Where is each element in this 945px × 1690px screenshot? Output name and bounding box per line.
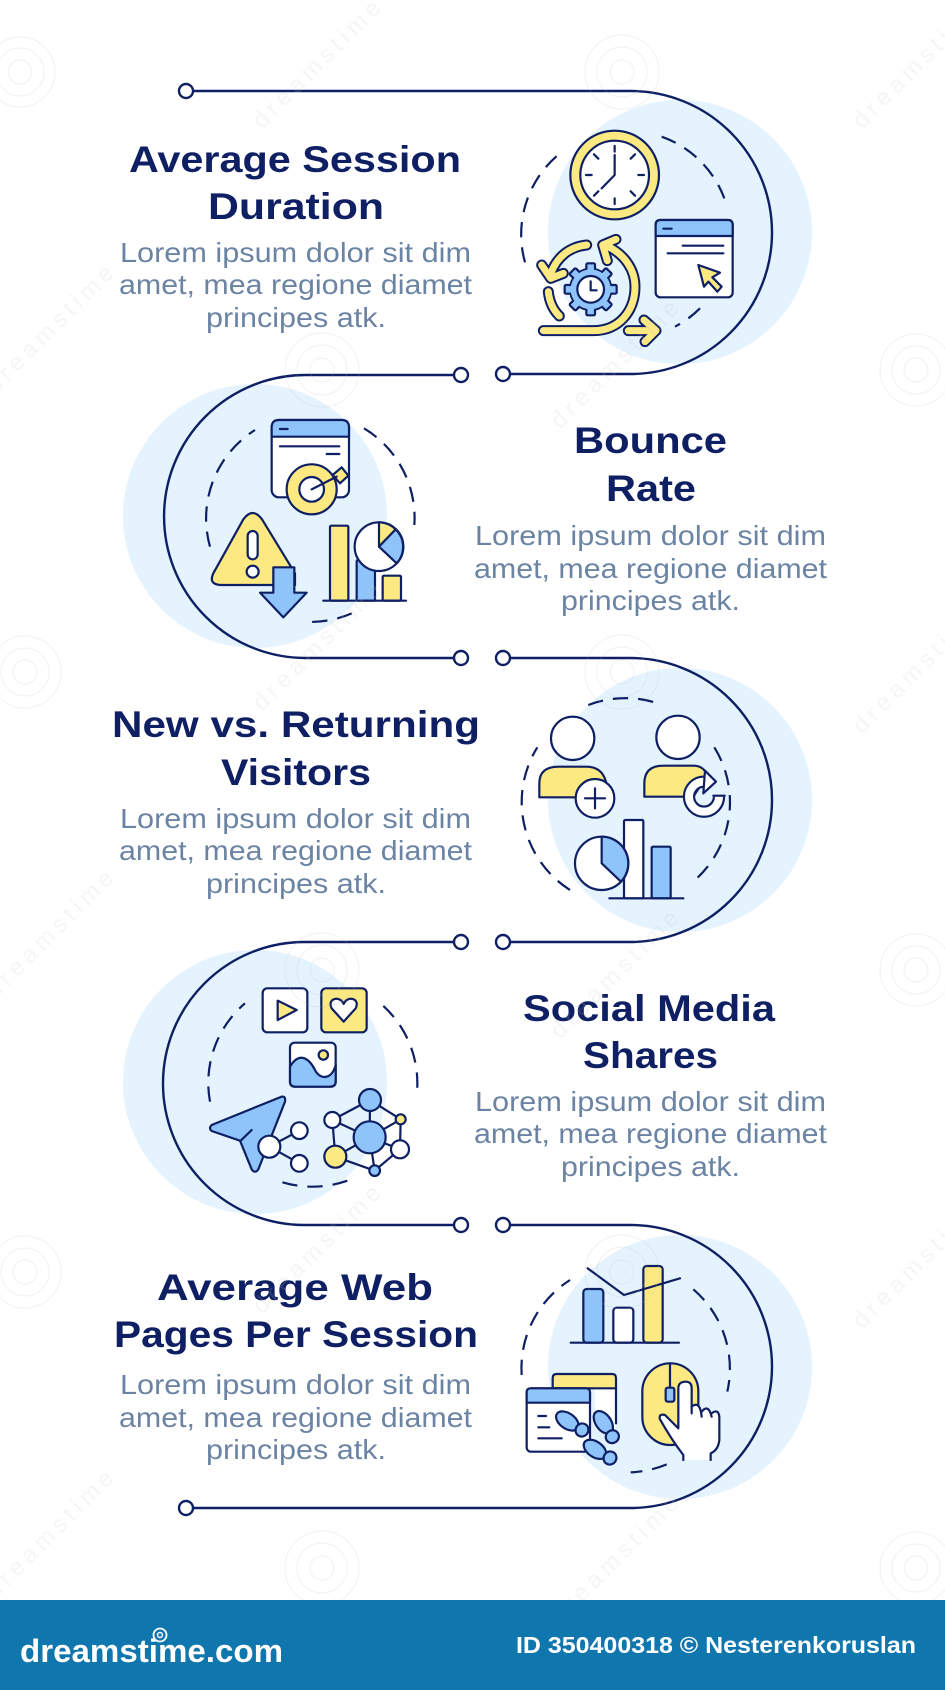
end node: [496, 367, 510, 381]
icon: bar chart, pages with footprints, mouse click: [521, 1266, 730, 1472]
background circle: [548, 668, 812, 932]
top node: [454, 368, 468, 382]
heading: [112, 704, 480, 793]
start node: [179, 84, 193, 98]
body text: amet, mea regione diamet: [474, 553, 827, 584]
connector line: [163, 942, 454, 1225]
heading: [574, 420, 727, 509]
bottom node: [454, 1218, 468, 1232]
body text: [474, 1086, 827, 1182]
icon: target, warning and charts: [206, 420, 415, 622]
background circle: [548, 1235, 812, 1499]
body text: principes atk.: [561, 1151, 740, 1182]
heading: Pages Per Session: [114, 1314, 478, 1355]
heading: Social Media: [523, 988, 775, 1029]
connector line: [510, 658, 772, 942]
heading: Shares: [583, 1035, 718, 1076]
panel: average session duration: [119, 84, 812, 381]
icon: media tiles, share plane and network: [208, 988, 417, 1187]
body text: [474, 520, 827, 616]
end node: [179, 1501, 193, 1515]
background circle: [548, 100, 812, 364]
heading: Rate: [606, 468, 696, 509]
heading: Visitors: [221, 752, 371, 793]
body text: Lorem ipsum dolor sit dim: [475, 520, 826, 551]
bottom node: [496, 935, 510, 949]
top node: [454, 935, 468, 949]
text: dreamstime: [545, 1490, 684, 1629]
heading: New vs. Returning: [112, 704, 480, 745]
body text: amet, mea regione diamet: [119, 835, 472, 866]
body text: amet, mea regione diamet: [119, 269, 472, 300]
body text: amet, mea regione diamet: [474, 1118, 827, 1149]
body text: principes atk.: [206, 1434, 386, 1465]
connector line: [164, 375, 454, 658]
panel: average web pages per session: [114, 1218, 812, 1515]
footer logo: dreamstime.com: [20, 1633, 283, 1669]
body text: [119, 803, 472, 899]
heading: Average Session: [129, 139, 461, 180]
body text: Lorem ipsum dolor sit dim: [120, 237, 471, 268]
footer credit: ID 350400318 © Nesterenkoruslan: [516, 1632, 916, 1658]
bottom node: [454, 651, 468, 665]
body text: Lorem ipsum dolor sit dim: [120, 1369, 471, 1400]
top node: [496, 651, 510, 665]
panel: bounce rate: [123, 368, 827, 665]
background circle: [123, 950, 387, 1214]
text: dreamstime: [247, 577, 386, 716]
body text: amet, mea regione diamet: [119, 1402, 472, 1433]
connector line: [193, 1225, 772, 1508]
top node: [496, 1218, 510, 1232]
heading: Average Web: [157, 1267, 433, 1308]
text: dreamstime: [247, 1180, 386, 1319]
body text: Lorem ipsum dolor sit dim: [120, 803, 471, 834]
footer bar: [0, 1600, 945, 1690]
background circle: [123, 384, 387, 648]
panel: social media shares: [123, 935, 827, 1232]
heading: [129, 139, 461, 227]
body text: principes atk.: [206, 868, 386, 899]
body text: principes atk.: [206, 302, 386, 333]
body text: [119, 1369, 472, 1465]
heading: [523, 988, 775, 1076]
text: dreamstime: [545, 295, 684, 434]
heading: [114, 1267, 478, 1355]
icon: visitors and charts: [522, 698, 730, 898]
body text: [119, 237, 472, 333]
body text: principes atk.: [561, 585, 740, 616]
text: dreamstime: [545, 905, 684, 1044]
connector line: [193, 91, 772, 374]
body text: Lorem ipsum dolor sit dim: [475, 1086, 826, 1117]
heading: Duration: [208, 186, 384, 227]
icon: clock, gear and browser window: [521, 131, 733, 342]
heading: Bounce: [574, 420, 727, 461]
panel: new vs returning visitors: [112, 651, 812, 949]
